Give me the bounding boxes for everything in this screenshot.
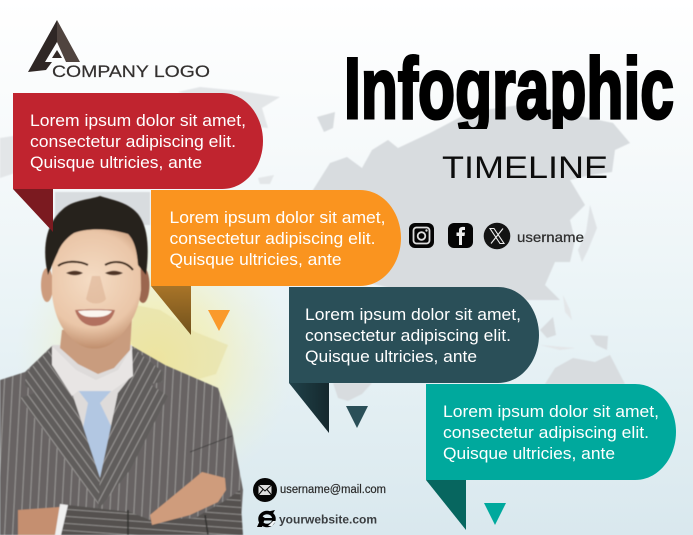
- icon: x: [484, 223, 510, 249]
- dark teal text: Quisque ultricies, ante: [305, 347, 477, 366]
- red text: Lorem ipsum dolor sit amet,: [30, 111, 246, 130]
- world map: [0, 87, 630, 401]
- dark teal marker: [346, 406, 368, 428]
- step 2: orange callout: [151, 190, 401, 335]
- smile: [75, 309, 115, 326]
- icon: email: [253, 478, 277, 502]
- orange text: Quisque ultricies, ante: [170, 250, 342, 269]
- dark teal text: [305, 305, 521, 366]
- step 4: teal callout: [426, 384, 676, 530]
- subtitle: TIMELINE: [442, 149, 608, 185]
- orange text: Lorem ipsum dolor sit amet,: [170, 208, 386, 227]
- logo mark: [28, 20, 80, 72]
- icon: website: [257, 510, 276, 527]
- social username: username: [517, 229, 584, 245]
- dark teal text: consectetur adipiscing elit.: [305, 326, 511, 345]
- company logo: [28, 20, 210, 81]
- hair: [45, 196, 148, 275]
- teal text: consectetur adipiscing elit.: [443, 423, 649, 442]
- website text: yourwebsite.com: [279, 514, 377, 526]
- right lapel: [98, 347, 168, 510]
- orange bubble: [151, 190, 401, 286]
- eyebrows and eyes: [58, 262, 133, 275]
- suit: [0, 346, 243, 535]
- teal text: Quisque ultricies, ante: [443, 444, 615, 463]
- dark teal bubble: [289, 287, 539, 383]
- teal text: [443, 402, 659, 463]
- social icons: [409, 223, 584, 249]
- neck: [60, 318, 132, 374]
- orange text: [170, 208, 386, 269]
- ear left: [41, 268, 53, 302]
- person photo illustration: [0, 196, 243, 535]
- orange marker: [208, 310, 230, 331]
- red tail: [13, 189, 53, 232]
- dark teal tail: [289, 383, 329, 433]
- step 3: dark teal callout: [289, 287, 539, 433]
- shirt: [52, 345, 133, 480]
- teal bubble: [426, 384, 676, 480]
- logo text: COMPANY LOGO: [52, 62, 210, 81]
- arms crossed: [0, 436, 243, 535]
- tie: [78, 390, 112, 478]
- email text: username@mail.com: [280, 484, 386, 496]
- contact details: [253, 478, 386, 527]
- red text: Quisque ultricies, ante: [30, 153, 202, 172]
- teal marker: [484, 503, 506, 525]
- icon: instagram: [409, 223, 434, 248]
- collar: [52, 346, 133, 396]
- red text: [30, 111, 246, 172]
- dark teal text: Lorem ipsum dolor sit amet,: [305, 305, 521, 324]
- orange text: consectetur adipiscing elit.: [170, 229, 376, 248]
- red bubble: [13, 93, 263, 189]
- face: [52, 225, 141, 349]
- red text: consectetur adipiscing elit.: [30, 132, 236, 151]
- orange tail: [151, 286, 191, 335]
- icon: facebook: [448, 223, 473, 248]
- nose: [86, 276, 106, 304]
- ear right: [136, 267, 150, 303]
- step 1: red callout: [13, 93, 263, 232]
- left lapel: [20, 347, 100, 505]
- teal text: Lorem ipsum dolor sit amet,: [443, 402, 659, 421]
- teal tail: [426, 480, 466, 530]
